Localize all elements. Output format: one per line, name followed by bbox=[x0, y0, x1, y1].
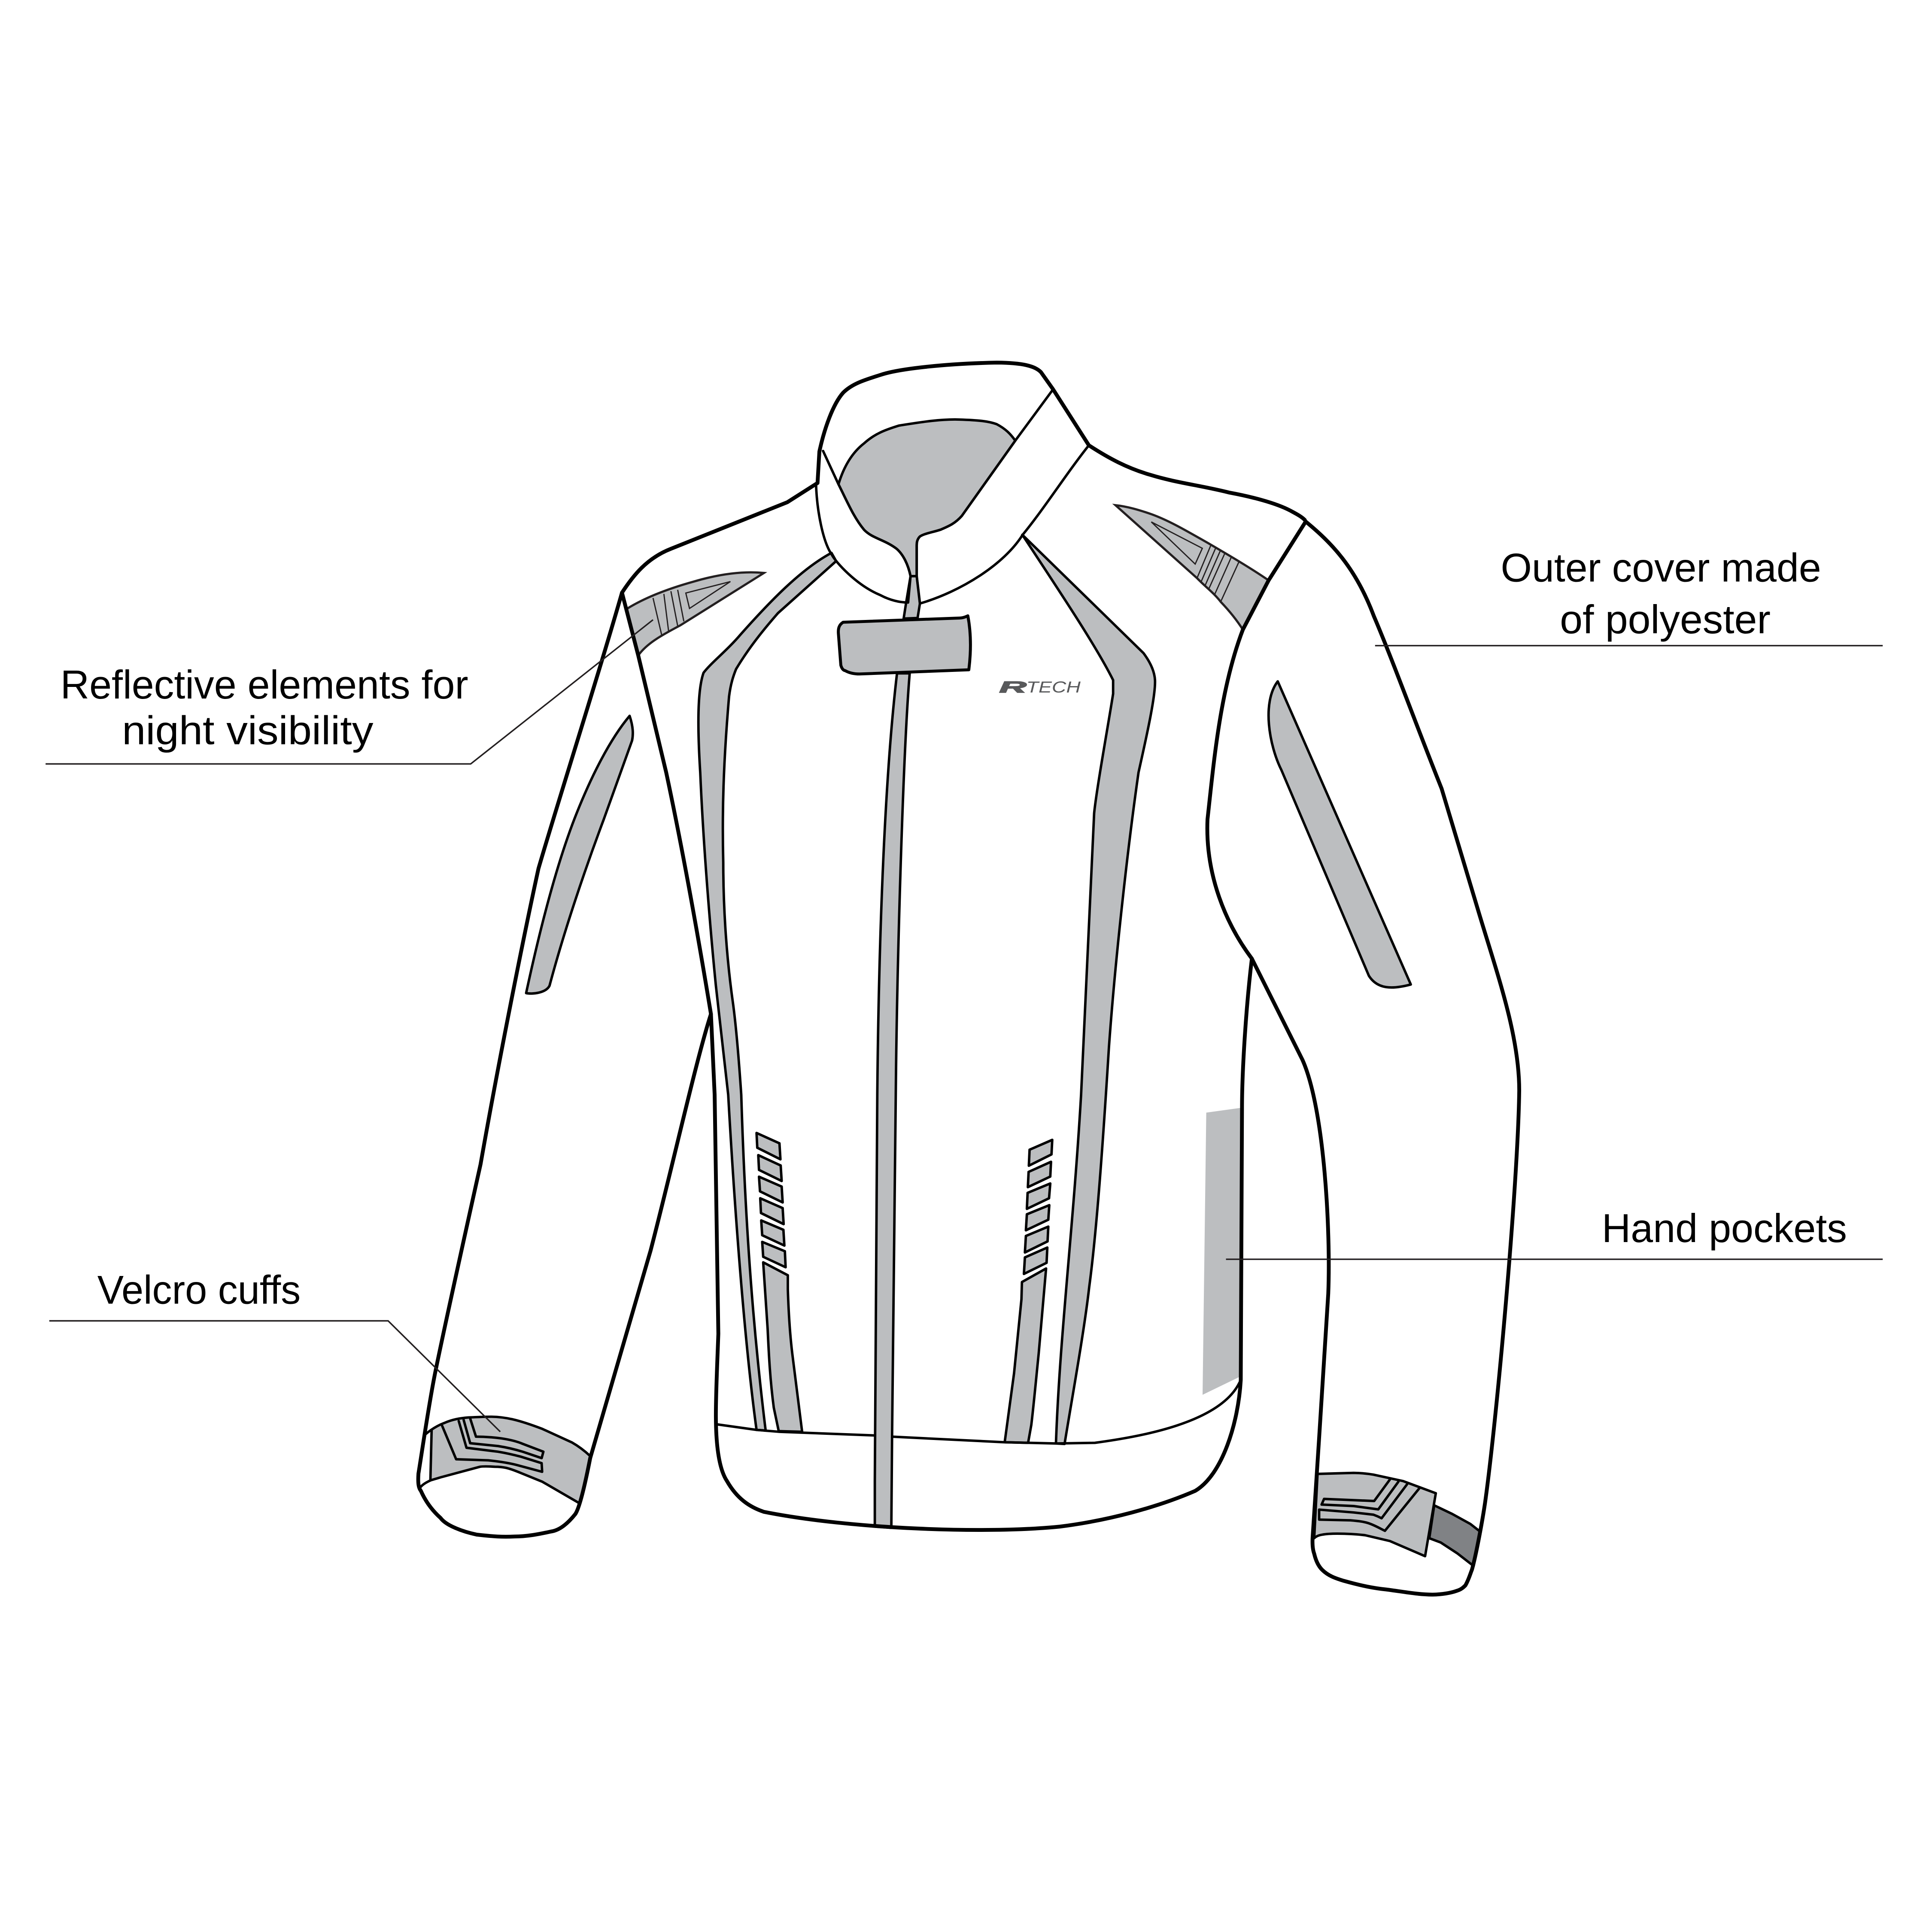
jacket outer outline: collar and shoulders bbox=[622, 363, 1305, 592]
label: reflective elements: Reflective elements for bbox=[61, 662, 468, 707]
hand pocket bbox=[1203, 1108, 1242, 1395]
right lower strip bbox=[1005, 1269, 1046, 1443]
label: velcro cuffs: Velcro cuffs bbox=[97, 1267, 301, 1312]
jacket illustration bbox=[418, 363, 1519, 1595]
left vents bbox=[756, 1133, 786, 1267]
left sleeve outline bbox=[418, 592, 711, 1537]
label: reflective elements bbox=[61, 662, 468, 753]
left lower strip bbox=[763, 1262, 802, 1432]
left reflective shoulder element bbox=[627, 572, 764, 656]
right vents bbox=[1024, 1140, 1052, 1274]
label: outer cover: Outer cover made bbox=[1501, 546, 1821, 590]
inner collar lining bbox=[838, 419, 1015, 576]
label: outer cover: of polyester bbox=[1560, 597, 1771, 642]
leader: outer cover bbox=[1375, 645, 1883, 646]
right chest panel bbox=[1022, 535, 1155, 1444]
collar tab bbox=[838, 616, 970, 674]
right collar flap bbox=[917, 390, 1089, 604]
leader: hand pockets bbox=[1226, 1259, 1883, 1260]
label: reflective elements: night visibility bbox=[122, 708, 374, 753]
left arm seam bbox=[622, 592, 711, 1014]
left cuff bbox=[421, 1417, 590, 1503]
R-TECH logo: TECH bbox=[1027, 678, 1081, 696]
label: outer cover bbox=[1501, 546, 1821, 642]
right sleeve outline bbox=[1207, 522, 1519, 1595]
left chest panel bbox=[699, 553, 836, 1431]
R-TECH logo bbox=[999, 678, 1081, 696]
R-TECH logo: R bbox=[999, 678, 1027, 696]
body outline bbox=[711, 959, 1252, 1530]
leader: velcro cuffs bbox=[49, 1321, 500, 1432]
left sleeve panel bbox=[526, 716, 633, 993]
centre zipper strip bbox=[875, 673, 910, 1528]
jacket hem line bbox=[717, 1382, 1239, 1443]
label: hand pockets: Hand pockets bbox=[1602, 1206, 1847, 1251]
right reflective shoulder element bbox=[1115, 505, 1269, 630]
right cuff bbox=[1314, 1473, 1480, 1566]
zipper strip top bbox=[904, 576, 920, 619]
right sleeve panel bbox=[1269, 681, 1411, 987]
leader: reflective elements bbox=[46, 620, 653, 764]
left collar flap bbox=[816, 451, 911, 602]
